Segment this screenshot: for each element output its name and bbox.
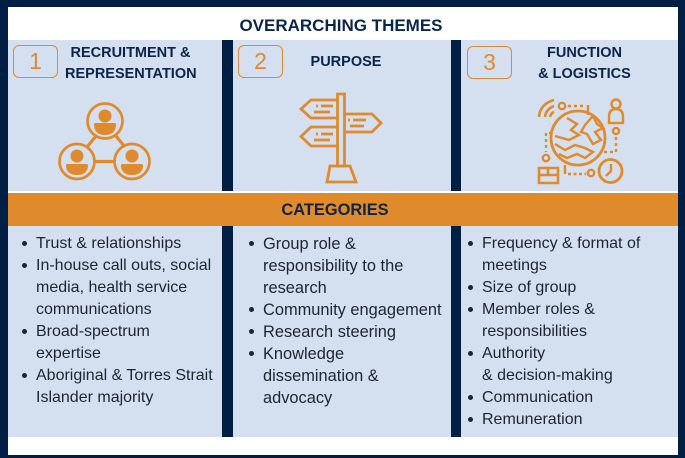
panel: function categories <box>461 226 678 437</box>
number badge 3 <box>467 46 512 79</box>
icon: connected people network <box>58 102 151 180</box>
list: function categories <box>468 235 640 428</box>
list: purpose categories: Group role & <box>263 235 356 253</box>
list: purpose categories: responsibility to the <box>263 257 403 275</box>
list: purpose categories: advocacy <box>263 389 332 407</box>
list: purpose categories: Community engagement <box>263 301 442 319</box>
list: function categories: Member roles & <box>482 301 595 318</box>
divider: lower left <box>222 226 233 437</box>
list: recruitment categories: In-house call outs, social <box>36 257 211 274</box>
divider: upper left <box>222 40 233 191</box>
panel: purpose categories <box>233 226 451 437</box>
list: purpose categories <box>249 235 442 407</box>
list: function categories: meetings <box>482 257 547 274</box>
list: purpose categories: research <box>263 279 327 297</box>
categories banner <box>8 193 678 226</box>
list: function categories: Authority <box>482 345 545 362</box>
number badge 1: 1 <box>29 48 42 74</box>
divider: upper right <box>451 40 461 191</box>
heading: function and logistics <box>538 45 631 82</box>
list: function categories: & decision-making <box>482 367 613 384</box>
heading: recruitment and representation: RECRUITMENT & <box>70 45 191 61</box>
list: recruitment categories: Broad-spectrum <box>36 323 150 340</box>
list: function categories: Remuneration <box>482 411 582 428</box>
list: purpose categories: Research steering <box>263 323 396 341</box>
list: function categories: Size of group <box>482 279 576 296</box>
number badge 2 <box>238 45 283 78</box>
heading: recruitment and representation <box>65 45 197 82</box>
heading: recruitment and representation: REPRESENTATION <box>65 66 197 82</box>
number badge 2: 2 <box>254 48 267 74</box>
title: OVERARCHING THEMES <box>239 16 443 35</box>
list: recruitment categories: Aboriginal & Torres Strait <box>36 367 213 384</box>
list: recruitment categories: Islander majority <box>36 389 153 406</box>
heading: function and logistics: FUNCTION <box>547 45 622 61</box>
panel: recruitment categories <box>8 226 222 437</box>
list: purpose categories: Knowledge <box>263 345 344 363</box>
number badge 1 <box>13 45 58 78</box>
list: recruitment categories: Trust & relationships <box>36 235 181 252</box>
list: purpose categories: dissemination & <box>263 367 379 385</box>
heading: function and logistics: & LOGISTICS <box>538 66 631 82</box>
number badge 3: 3 <box>483 49 496 75</box>
icon: signpost <box>299 92 383 184</box>
list: recruitment categories: expertise <box>36 345 101 362</box>
categories banner: CATEGORIES <box>281 201 389 219</box>
panel: theme 3 function and logistics <box>461 40 678 191</box>
list: recruitment categories <box>22 235 213 406</box>
list: recruitment categories: media, health service <box>36 279 187 296</box>
divider: lower right <box>451 226 461 437</box>
list: function categories: responsibilities <box>482 323 587 340</box>
panel: theme 2 purpose <box>233 40 451 191</box>
list: recruitment categories: communications <box>36 301 152 318</box>
heading: purpose: PURPOSE <box>311 54 381 70</box>
list: function categories: Frequency & format of <box>482 235 640 252</box>
icon: globe with connections <box>538 98 624 184</box>
list: function categories: Communication <box>482 389 593 406</box>
panel: theme 1 recruitment and representation <box>8 40 222 191</box>
